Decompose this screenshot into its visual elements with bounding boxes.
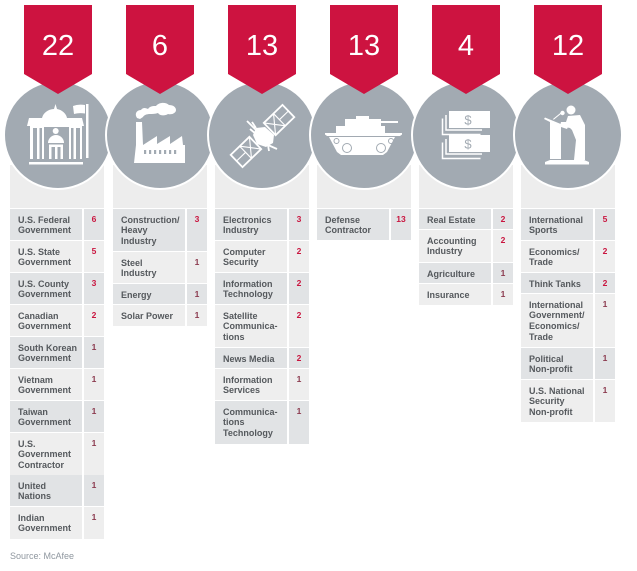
table: government: 5 [92, 246, 96, 256]
banner: 6: 6 [152, 30, 168, 62]
table: government: Government [18, 523, 71, 533]
table: technology: 3 [297, 214, 301, 224]
table: finance [419, 209, 513, 305]
table: industry: Construction/ [121, 215, 180, 225]
table: industry: Energy [121, 290, 152, 300]
table: technology: 1 [297, 406, 301, 416]
circle: industry [106, 81, 214, 189]
table: government: U.S. Federal [18, 215, 70, 225]
banner: 13: 13 [246, 30, 278, 62]
table: policy: International [529, 300, 583, 310]
table: defense [317, 209, 411, 240]
table: policy: 2 [603, 246, 607, 256]
source note: Source: McAfee [10, 551, 74, 561]
table: finance: 2 [501, 214, 505, 224]
table: government: Canadian [18, 311, 59, 321]
table: finance: 1 [501, 289, 505, 299]
table: defense: 13 [396, 214, 406, 224]
icon: speaker at podium [544, 106, 589, 164]
grey backdrop: column 5 [419, 165, 513, 208]
table: government: 1 [92, 342, 96, 352]
table: government: U.S. [18, 439, 36, 449]
table: policy: Sports [529, 225, 558, 235]
table: policy [521, 209, 615, 422]
banner: 12 [534, 5, 602, 94]
table: industry [113, 209, 207, 326]
table: technology: Information [223, 279, 272, 289]
table: industry: Solar Power [121, 311, 173, 321]
table: technology: Computer [223, 247, 266, 257]
table: defense: Defense [325, 215, 360, 225]
table: government: Government [18, 353, 71, 363]
table: technology: Electronics [223, 215, 272, 225]
table: technology: Technology [223, 428, 273, 438]
table: government: Vietnam [18, 375, 53, 385]
table: government: Government [18, 385, 71, 395]
table: government: Government [18, 225, 71, 235]
circle: finance [412, 81, 520, 189]
table: technology: Information [223, 375, 272, 385]
table: policy: 2 [603, 278, 607, 288]
circle: technology [208, 81, 316, 189]
grey backdrop: column 1 [10, 165, 104, 208]
table: government: 1 [92, 438, 96, 448]
table: government: Taiwan [18, 407, 48, 417]
table: policy: Trade [529, 257, 553, 267]
circle: government [4, 81, 112, 189]
banner: 4: 4 [458, 30, 474, 62]
table: industry: Industry [121, 236, 157, 246]
banner: 13: 13 [348, 30, 380, 62]
table: policy: International [529, 215, 583, 225]
table: policy: Political [529, 354, 564, 364]
table: technology: Communica- [223, 321, 278, 331]
table: policy: Non-profit [529, 407, 572, 417]
table: finance: Real Estate [427, 215, 476, 225]
table: industry: 1 [195, 257, 199, 267]
table: policy: Think Tanks [529, 279, 581, 289]
table: industry: Heavy [121, 225, 148, 235]
table: technology [215, 209, 309, 444]
table: industry: 1 [195, 289, 199, 299]
table: government: 1 [92, 480, 96, 490]
table: technology: tions [223, 417, 244, 427]
table: industry: Industry [121, 268, 157, 278]
table: government: 3 [92, 278, 96, 288]
table: policy: 5 [603, 214, 607, 224]
banner: 13 [228, 5, 296, 94]
table: technology: 1 [297, 374, 301, 384]
table: defense: Contractor [325, 225, 371, 235]
table: finance: Accounting [427, 236, 476, 246]
table: technology: Satellite [223, 311, 258, 321]
table: government: Government [18, 321, 71, 331]
table: policy: Economics/ [529, 247, 580, 257]
grey backdrop: column 4 [317, 165, 411, 208]
banner: 22 [24, 5, 92, 94]
table: policy: 1 [603, 353, 607, 363]
banner: 13 [330, 5, 398, 94]
table: technology: Communica- [223, 407, 278, 417]
table: government: Government [18, 257, 71, 267]
table: finance: 1 [501, 268, 505, 278]
table: policy: Security [529, 396, 565, 406]
table: technology: 2 [297, 278, 301, 288]
banner: 6 [126, 5, 194, 94]
table: technology: Security [223, 257, 259, 267]
table: technology: 2 [297, 353, 301, 363]
table: policy: 1 [603, 299, 607, 309]
icon: money stacks: $ [464, 112, 472, 128]
table: government: 1 [92, 406, 96, 416]
table: government: Government [18, 449, 71, 459]
table: industry: 3 [195, 214, 199, 224]
table: government: U.S. State [18, 247, 60, 257]
table: industry: 1 [195, 310, 199, 320]
table: technology: Services [223, 385, 260, 395]
table: government: Indian [18, 513, 44, 523]
table: technology: Industry [223, 225, 259, 235]
circle: defense [310, 81, 418, 189]
table: policy: 1 [603, 385, 607, 395]
table: technology: 2 [297, 246, 301, 256]
header graphic: banners, circles and icons [5, 5, 621, 208]
table: government [10, 209, 104, 539]
table: policy: Non-profit [529, 364, 572, 374]
table: policy: Trade [529, 332, 553, 342]
table: technology: 2 [297, 310, 301, 320]
table: government: U.S. County [18, 279, 69, 289]
banner: 4 [432, 5, 500, 94]
table: government: Nations [18, 491, 51, 501]
table: industry: Steel [121, 258, 143, 268]
table: technology: News Media [223, 354, 275, 364]
table: government: United [18, 481, 46, 491]
icon: money stacks: $ [464, 136, 472, 152]
table: government: 2 [92, 310, 96, 320]
table: government: Contractor [18, 460, 64, 470]
table: finance: Industry [427, 246, 463, 256]
icon: money stacks [442, 111, 490, 158]
table: government: Government [18, 289, 71, 299]
table: policy: Government/ [529, 310, 585, 320]
table: government: South Korean [18, 343, 77, 353]
table: finance: Insurance [427, 290, 470, 300]
icon: government building [27, 104, 88, 164]
grey backdrop: column 6 [521, 165, 615, 208]
table: technology: tions [223, 332, 244, 342]
table: government: 1 [92, 374, 96, 384]
table: finance: 2 [501, 235, 505, 245]
table: government: 1 [92, 512, 96, 522]
icon: tank [325, 116, 402, 155]
icon: satellite [231, 105, 294, 167]
banner: 22: 22 [42, 30, 74, 62]
grey backdrop: column 3 [215, 165, 309, 208]
table: government: 6 [92, 214, 96, 224]
banner: 12: 12 [552, 30, 584, 62]
table: finance: Agriculture [427, 269, 475, 279]
grey backdrop: column 2 [113, 165, 207, 208]
circle: policy [514, 81, 622, 189]
table: technology: Technology [223, 289, 273, 299]
table: policy: Economics/ [529, 321, 580, 331]
table: policy: U.S. National [529, 386, 585, 396]
table: government: Government [18, 417, 71, 427]
icon: factory [134, 103, 185, 163]
